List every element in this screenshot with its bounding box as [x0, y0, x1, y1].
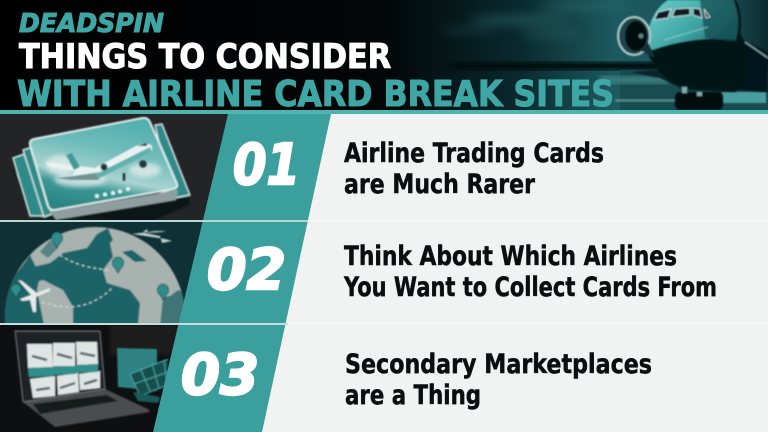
- parcel: [117, 348, 157, 391]
- panel: photo of laptop marketplace and cart: [0, 325, 190, 432]
- text block: item 2: [343, 241, 717, 303]
- text block: item 3: [345, 349, 652, 411]
- header rule: [0, 110, 768, 114]
- card airliner: [45, 144, 152, 178]
- header photo: stormy sky and airliner: [440, 0, 768, 110]
- flight routes: [60, 255, 108, 270]
- number 02: 02: [207, 238, 286, 303]
- text block: item 3: are a Thing: [345, 380, 481, 411]
- logo: DEADSPIN: DEADSPIN: [19, 9, 164, 39]
- card clouds: [46, 155, 161, 187]
- globe seas: [0, 228, 190, 325]
- panel: header banner: [0, 0, 768, 115]
- panel: teal number band: [153, 114, 331, 432]
- row dividers: [0, 220, 768, 325]
- text block: item 3: Secondary Marketplaces: [345, 349, 652, 380]
- panel: light content background: [200, 114, 768, 432]
- globe land: [4, 226, 184, 323]
- text block: item 1: Airline Trading Cards: [344, 138, 604, 169]
- shopping cart: [130, 359, 168, 403]
- text block: item 1: are Much Rarer: [344, 169, 536, 200]
- text block: item 1: [344, 138, 604, 200]
- small planes: [132, 229, 172, 243]
- heading line two: WITH AIRLINE CARD BREAK SITES: [17, 74, 614, 115]
- number 03: 03: [181, 343, 259, 408]
- laptop: [23, 389, 150, 427]
- map pins: [11, 232, 169, 300]
- text block: item 2: Think About Which Airlines: [344, 241, 677, 272]
- number 01: 01: [233, 133, 300, 198]
- heading line one: THINGS TO CONSIDER: [19, 37, 391, 77]
- panel: photo of globe with flight routes: [0, 222, 202, 323]
- panel: photo of airline trading cards: [0, 114, 240, 222]
